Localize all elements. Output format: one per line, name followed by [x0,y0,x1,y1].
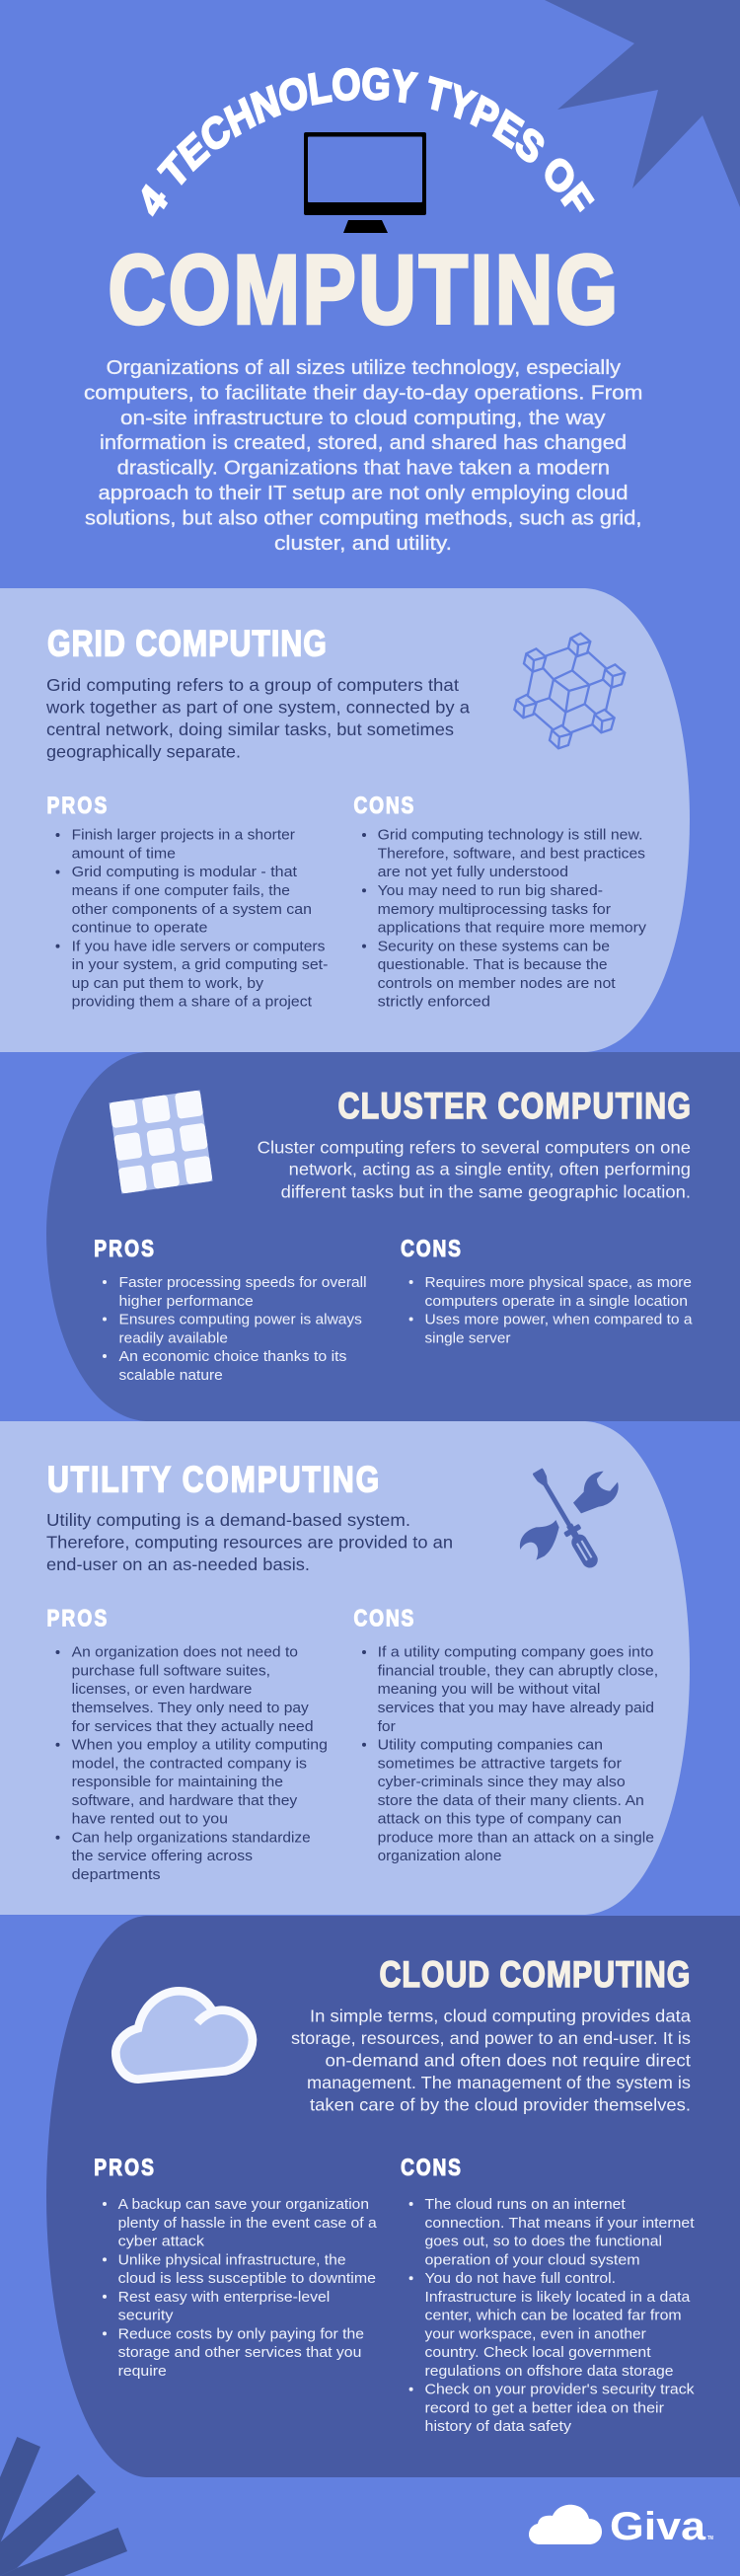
pros heading: PROS [47,1604,107,1631]
pros list: plenty of hassle in the event case of a [118,2215,377,2232]
cons list: Requires more physical space, as more [424,1274,692,1291]
pros list: higher performance [118,1293,254,1310]
cons list: Therefore, software, and best practices [378,845,645,863]
pros list: Can help organizations standardize [72,1829,311,1846]
cons list: are not yet fully understood [378,864,568,880]
icon: cloud [115,1991,253,2080]
panel: cloud computing [46,1916,740,2477]
description: central network, doing similar tasks, but sometimes [46,720,454,739]
pros list: An economic choice thanks to its [118,1348,347,1365]
intro text: information is created, stored, and shared has changed [100,432,627,454]
cons heading: CONS [401,1235,461,1262]
cons list: goes out, so to does the functional [424,2233,662,2250]
logo: Giva [529,2505,713,2548]
description: In simple terms, cloud computing provides data [310,2006,691,2025]
decorative star top right [545,0,740,207]
pros list: An organization does not need to [72,1644,298,1661]
panel: cluster computing [46,1052,740,1421]
intro text: drastically. Organizations that have taken a modern [117,458,610,480]
description: Cluster computing refers to several computers on one [258,1137,691,1157]
pros list: Faster processing speeds for overall [118,1274,367,1291]
cons list: your workspace, even in another [424,2325,646,2342]
pros list: continue to operate [72,920,207,936]
description [291,2006,691,2115]
cons list: organization alone [378,1848,501,1864]
pros heading: PROS [94,2154,154,2181]
description [258,1137,691,1201]
cons list: services that you may have already paid [378,1700,654,1716]
cons list: controls on member nodes are not [378,975,617,992]
cons list: connection. That means if your internet [424,2215,695,2232]
cons heading: CONS [401,2154,461,2181]
cons list: You do not have full control. [424,2270,616,2287]
heading: cluster computing: CLUSTER COMPUTING [337,1086,691,1127]
pros list: A backup can save your organization [118,2196,369,2213]
description: Utility computing is a demand-based system. [46,1510,410,1530]
description [45,675,470,761]
cons list [362,827,647,1011]
pros list: for services that they actually need [72,1718,314,1735]
pros heading: PROS [94,1235,154,1262]
description [46,1510,453,1574]
pros list: in your system, a grid computing set- [72,956,328,973]
intro text: approach to their IT setup are not only employing cloud [99,483,628,504]
cons list: single server [424,1329,511,1346]
cons list [409,2196,695,2435]
cons list: sometimes be attractive targets for [378,1755,622,1772]
pros list: Ensures computing power is always [118,1311,362,1328]
pros list: cyber attack [118,2233,205,2250]
intro text: on-site infrastructure to cloud computing, the way [120,408,606,429]
description: end-user on an as-needed basis. [46,1554,310,1574]
pros list: Grid computing is modular - that [72,864,298,880]
panel: utility computing [0,1421,690,1915]
cons list: You may need to run big shared- [378,882,603,899]
cons list: applications that require more memory [378,920,647,936]
cons list: Check on your provider's security track [424,2382,695,2398]
cons list: computers operate in a single location [424,1293,688,1310]
intro text: solutions, but also other computing methods, such as grid, [85,507,641,529]
icon: cluster grid [109,1090,213,1194]
pros list [103,2196,377,2380]
pros list: readily available [118,1329,228,1346]
cons list: financial trouble, they can abruptly close, [378,1662,658,1680]
pros list [103,1274,367,1384]
cons list: Grid computing technology is still new. [378,827,643,844]
cons list [362,1644,658,1864]
description: Grid computing refers to a group of computers that [46,675,459,695]
arched title: 4 TECHNOLOGY TYPES OF [142,67,595,217]
description: network, acting as a single entity, often performing [289,1160,691,1179]
description: management. The management of the system is [307,2073,691,2092]
pros list: Rest easy with enterprise-level [118,2289,330,2306]
pros list: security [118,2308,174,2324]
description: Therefore, computing resources are provided to an [46,1533,453,1553]
pros list: model, the contracted company is [72,1755,307,1772]
cons list: store the data of their many clients. An [378,1792,644,1809]
cons list: attack on this type of company can [378,1811,622,1828]
pros list: the service offering across [72,1848,253,1864]
header [84,67,643,555]
pros list: Unlike physical infrastructure, the [118,2251,346,2268]
pros list [55,827,328,1011]
cons list: regulations on offshore data storage [424,2363,673,2380]
cons list: meaning you will be without vital [378,1681,600,1698]
cons list: If a utility computing company goes into [378,1644,653,1661]
cons list: strictly enforced [378,994,490,1011]
pros list: If you have idle servers or computers [72,938,325,954]
pros list: themselves. They only need to pay [72,1700,309,1716]
pros list: purchase full software suites, [72,1662,270,1680]
screwdriver [530,1467,602,1571]
cons list: operation of your cloud system [424,2251,640,2268]
intro text: Organizations of all sizes utilize technology, especially [107,357,621,379]
logo wordmark: Giva [610,2505,706,2548]
decorative rays bottom left [0,2437,127,2576]
pros list: When you employ a utility computing [72,1737,328,1753]
pros list: require [118,2363,167,2380]
pros list: departments [72,1866,161,1883]
description: different tasks but in the same geographic location. [281,1181,691,1201]
cons list: center, which can be located far from [424,2308,682,2324]
trademark: TM [707,2536,713,2541]
cons list: country. Check local government [424,2344,651,2361]
cons list: The cloud runs on an internet [424,2196,627,2213]
pros list: have rented out to you [72,1811,228,1828]
description: work together as part of one system, connected by a [45,697,470,717]
icon: monitor [304,132,426,233]
cons list: Security on these systems can be [378,938,610,954]
cons heading: CONS [353,1604,413,1631]
cons list: record to get a better idea on their [424,2400,664,2416]
cons list: cyber-criminals since they may also [378,1774,626,1790]
cons list: Uses more power, when compared to a [424,1311,693,1328]
main title: COMPUTING [109,236,618,344]
pros list: up can put them to work, by [72,975,264,992]
icon: grid network [514,634,625,748]
description: storage, resources, and power to an end-user. It is [291,2028,691,2048]
cons list: produce more than an attack on a single [378,1829,654,1846]
pros list: other components of a system can [72,901,312,918]
pros list: scalable nature [118,1367,223,1384]
cons list: questionable. That is because the [378,956,608,973]
pros list [55,1644,328,1883]
cons list: Utility computing companies can [378,1737,603,1753]
pros list: responsible for maintaining the [72,1774,283,1790]
pros list: amount of time [72,845,176,863]
panel: grid computing [0,588,690,1052]
heading: utility computing: UTILITY COMPUTING [47,1460,379,1500]
pros list: means if one computer fails, the [72,882,290,899]
description: geographically separate. [46,741,241,761]
pros list: providing them a share of a project [72,994,313,1011]
description: taken care of by the cloud provider themselves. [310,2095,691,2115]
cons list: Infrastructure is likely located in a data [424,2289,691,2306]
heading: grid computing: GRID COMPUTING [47,624,327,664]
cons list: for [378,1718,396,1735]
pros list: storage and other services that you [118,2344,361,2361]
cons list [409,1274,693,1346]
description: on-demand and often does not require direct [326,2051,691,2071]
cons list: memory multiprocessing tasks for [378,901,611,918]
icon: tools [520,1467,619,1571]
cons list: history of data safety [424,2418,572,2435]
intro text: cluster, and utility. [274,533,452,555]
intro text: computers, to facilitate their day-to-day operations. From [84,382,643,404]
pros list: cloud is less susceptible to downtime [118,2270,376,2287]
pros list: Reduce costs by only paying for the [118,2325,364,2342]
pros list: licenses, or even hardware [72,1681,252,1698]
pros list: software, and hardware that they [72,1792,298,1809]
intro text [84,357,643,555]
cons heading: CONS [353,792,413,819]
icon: logo cloud [529,2505,602,2544]
pros heading: PROS [47,792,107,819]
heading: cloud computing: CLOUD COMPUTING [379,1954,690,1996]
pros list: Finish larger projects in a shorter [72,827,295,844]
